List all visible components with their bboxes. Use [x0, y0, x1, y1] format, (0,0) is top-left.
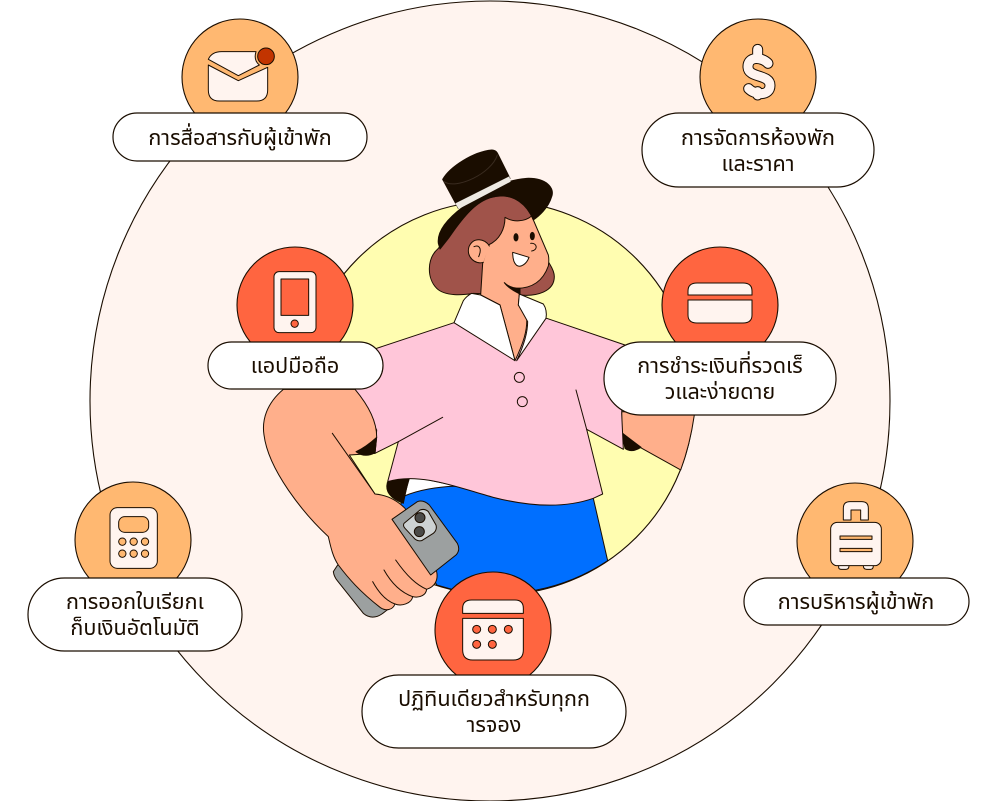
icon: calendar [435, 572, 551, 688]
label: room and rate management: และราคา [721, 151, 795, 176]
icon: credit card [662, 247, 778, 363]
phone camera [404, 509, 436, 541]
label: guest management [744, 578, 969, 625]
shirt [355, 318, 625, 505]
eyes [514, 232, 534, 241]
shorts [400, 486, 608, 592]
inner shadow [387, 477, 409, 503]
label: room and rate management: การจัดการห้องพัก [681, 125, 835, 150]
label: guest management: การบริหารผู้เข้าพัก [778, 589, 934, 615]
icon: mobile phone [237, 247, 353, 363]
label: guest communication [113, 113, 367, 161]
ear [468, 240, 489, 263]
left arm and hand [263, 389, 437, 610]
right arm [622, 412, 694, 470]
label: mobile app [208, 342, 383, 389]
character illustration [263, 150, 694, 617]
face and neck [481, 216, 549, 361]
label: room and rate management [642, 113, 874, 187]
label: single booking calendar: ารจอง [467, 712, 521, 737]
icon: email [182, 19, 298, 135]
label: automatic invoicing: การออกใบเรียกเ [66, 589, 204, 614]
background circle [90, 1, 890, 801]
nose [531, 243, 536, 251]
label: automatic invoicing [28, 578, 242, 651]
label: single booking calendar [362, 675, 626, 748]
phone front [392, 501, 459, 575]
label: guest communication: การสื่อสารกับผู้เข้าพัก [148, 123, 332, 151]
label: single booking calendar: ปฏิทินเดียวสำหรับทุกก [398, 686, 590, 712]
chin shadow [504, 283, 520, 294]
label: fast payment: วและง่ายดาย [665, 379, 775, 404]
icon: dollar [700, 19, 816, 135]
phone body behind hand [333, 564, 400, 617]
label: fast payment [604, 342, 836, 415]
left cuff shadow [356, 437, 377, 455]
yellow centre circle [300, 201, 694, 595]
icon: luggage [797, 483, 913, 599]
hat [438, 150, 552, 249]
shirt buttons [514, 372, 527, 407]
collar [454, 293, 546, 361]
hair [429, 196, 554, 295]
label: mobile app: แอปมือถือ [251, 353, 339, 378]
shirt undershirt [404, 476, 457, 496]
mouth [513, 252, 529, 266]
icon: calculator [75, 482, 191, 598]
right cuff shadow [622, 433, 641, 451]
label: fast payment: การชำระเงินที่รวดเร็ [637, 351, 803, 378]
label: automatic invoicing: ก็บเงินอัตโนมัติ [70, 615, 200, 640]
